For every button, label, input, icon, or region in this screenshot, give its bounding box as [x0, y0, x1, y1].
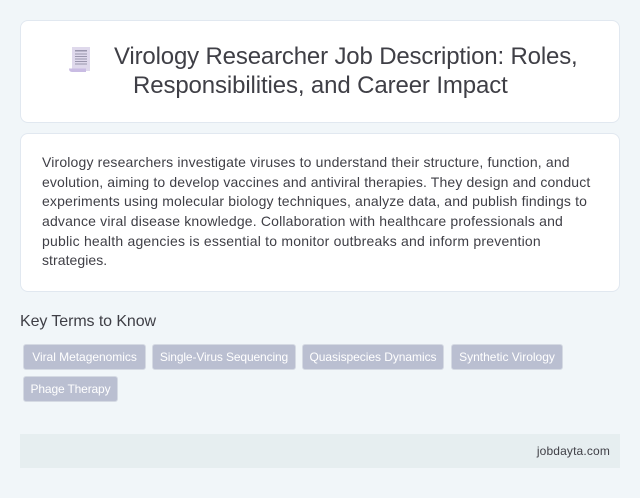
footer source: jobdayta.com [537, 444, 610, 458]
heading: key terms: Key Terms to Know [20, 313, 156, 330]
description text: experiments using molecular biology techniques, analyze data, and publish findings to [42, 193, 587, 209]
description text: advance viral disease knowledge. Collaboration with healthcare professionals and [42, 213, 563, 229]
title: Virology Researcher Job Description: Roles, [114, 43, 578, 70]
description text: public health agencies is essential to monitor outbreaks and inform prevention [42, 233, 541, 249]
description text: Virology researchers investigate viruses to understand their structure, function, and [42, 154, 570, 170]
title: Responsibilities, and Career Impact [133, 72, 508, 99]
description text: strategies. [42, 252, 107, 268]
tag list: Quasispecies Dynamics [310, 350, 436, 364]
tag list: Phage Therapy [31, 382, 110, 396]
title [114, 43, 578, 99]
tag list: Viral Metagenomics [32, 350, 137, 364]
icon: document scroll [69, 47, 90, 72]
footer bar [20, 434, 620, 468]
tag list: Single-Virus Sequencing [160, 350, 288, 364]
description text: evolution, aiming to develop vaccines and antiviral therapies. They design and conduct [42, 174, 590, 190]
tag list [23, 344, 563, 402]
description text [42, 154, 590, 268]
panel: description card [20, 133, 620, 292]
panel: title card [20, 20, 620, 123]
tag list: Synthetic Virology [459, 350, 555, 364]
